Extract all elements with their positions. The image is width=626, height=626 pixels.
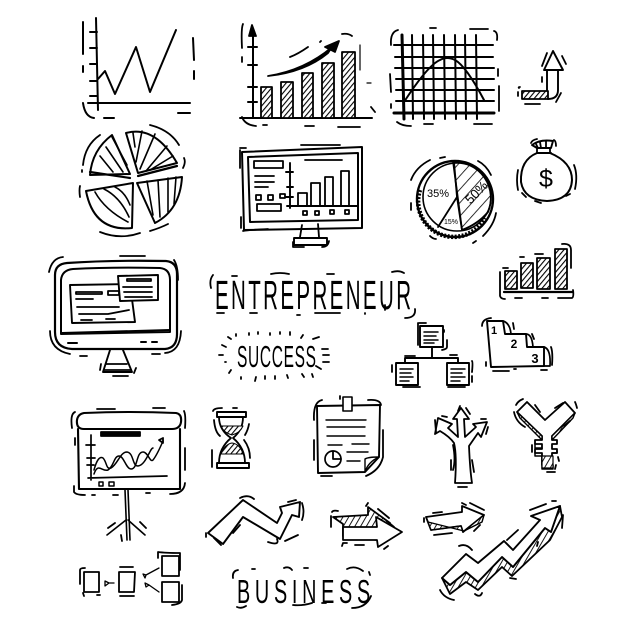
line chart — [83, 18, 194, 118]
label: 15%: 15% — [444, 219, 458, 226]
up arrow — [518, 51, 566, 104]
3D block arrow — [424, 503, 484, 535]
money bag — [517, 139, 576, 203]
label: step 1: 1 — [491, 325, 497, 337]
presentation board — [71, 408, 185, 541]
label: SUCCESS with rays — [219, 332, 329, 381]
grid bell curve chart — [390, 28, 499, 126]
document note — [314, 396, 383, 476]
flow diagram — [80, 552, 182, 605]
label: 35%: 35% — [427, 188, 449, 200]
zigzag arrow — [206, 496, 304, 545]
desktop monitor with chart — [240, 145, 362, 247]
title: ENTREPRENEUR: ENTREPRENEUR — [215, 272, 411, 318]
label: 50%: 50% — [462, 178, 491, 207]
hourglass — [212, 408, 250, 468]
label: step 2: 2 — [511, 337, 518, 351]
double arrow — [331, 503, 402, 549]
podium steps — [482, 318, 552, 371]
percentage pie chart — [411, 157, 496, 243]
organization chart — [392, 323, 472, 387]
rising bar chart — [240, 24, 375, 127]
large computer monitor — [49, 256, 181, 376]
exploded pie chart — [80, 125, 185, 236]
big zigzag growth arrow — [440, 501, 563, 600]
small bar chart — [500, 244, 573, 299]
yen symbol — [514, 399, 577, 472]
label: SUCCESS with rays: SUCCESS — [237, 340, 316, 375]
title: BUSINESS: BUSINESS — [237, 573, 370, 610]
three-way arrow — [435, 406, 488, 487]
money bag: $ — [539, 165, 553, 193]
label: step 3: 3 — [531, 351, 539, 366]
